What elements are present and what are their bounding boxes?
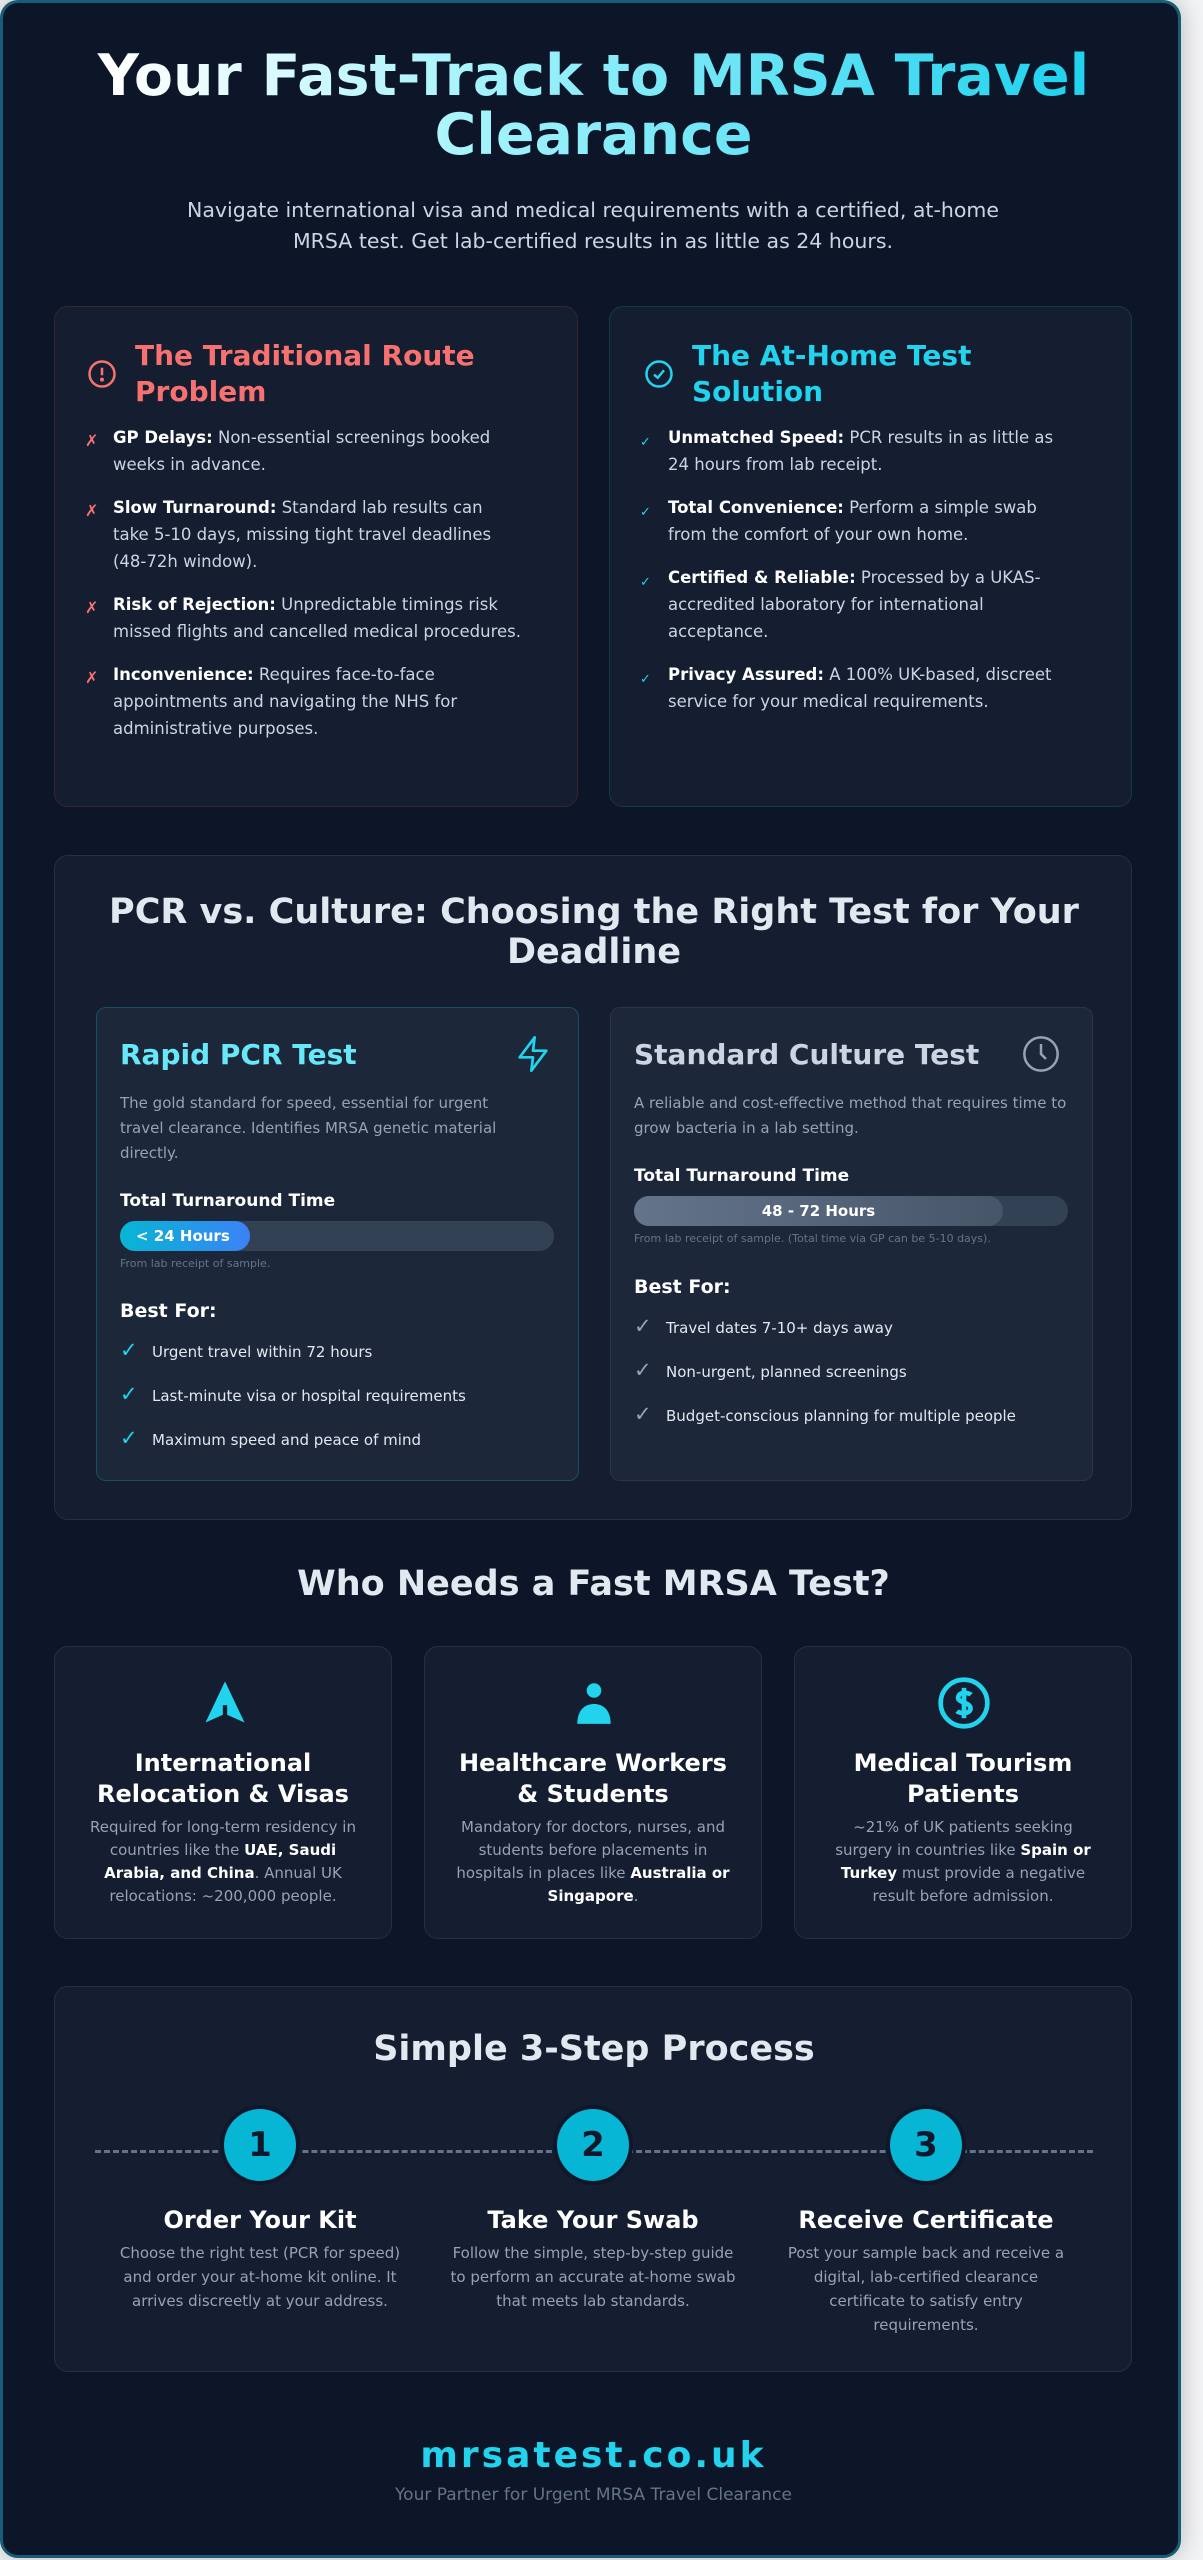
- turnaround bar PCR: [120, 1191, 554, 1270]
- best for PCR: [120, 1300, 466, 1450]
- solution list: Certified & Reliable: Processed by a UKAS-accredited laboratory for international acceptance.: [668, 568, 1041, 641]
- step 3: 3: [914, 2125, 938, 2165]
- card: healthcare: & Students: [517, 1780, 669, 1808]
- turnaround bar PCR: < 24 Hours: [136, 1227, 230, 1245]
- title: [3, 47, 1184, 165]
- icon: navigation arrow: [206, 1682, 244, 1722]
- card: relocation: Relocation & Visas: [97, 1780, 349, 1808]
- card: medical tourism: ~21% of UK patients seeking surgery in countries like Spain or Turkey must provide a negative result before admission.: [835, 1818, 1091, 1905]
- step 3: Receive Certificate: [798, 2206, 1054, 2234]
- card: healthcare: Healthcare Workers: [459, 1749, 727, 1777]
- best for culture: ✓: [634, 1314, 652, 1338]
- problem list: Inconvenience: Requires face-to-face appointments and navigating the NHS for administrative purposes.: [113, 665, 457, 738]
- heading: solution: The At-Home Test: [692, 339, 971, 372]
- heading: problem: Problem: [135, 375, 266, 408]
- card: medical tourism: Medical Tourism: [854, 1749, 1072, 1777]
- card: relocation: International: [135, 1749, 311, 1777]
- best for PCR: Urgent travel within 72 hours: [152, 1343, 372, 1361]
- step 3: [788, 2109, 1064, 2334]
- solution list: Unmatched Speed: PCR results in as little as 24 hours from lab receipt.: [668, 428, 1053, 474]
- problem list: GP Delays: Non-essential screenings booked weeks in advance.: [113, 428, 490, 474]
- heading: PCR vs culture: Deadline: [507, 932, 681, 972]
- best for PCR: ✓: [120, 1382, 138, 1406]
- solution list: ✓: [640, 505, 651, 520]
- card: healthcare: Mandatory for doctors, nurses, and students before placements in hospitals in places like Australia or Singapore.: [456, 1818, 730, 1905]
- best for culture: ✓: [634, 1402, 652, 1426]
- footer tagline: Your Partner for Urgent MRSA Travel Clearance: [395, 2485, 792, 2505]
- problem list: ✗: [85, 668, 98, 687]
- card: relocation: [54, 1646, 392, 1939]
- step 2: Take Your Swab: [487, 2206, 699, 2234]
- best for culture: Travel dates 7-10+ days away: [666, 1319, 893, 1337]
- best for culture: [634, 1276, 1016, 1426]
- icon: person: [577, 1683, 611, 1724]
- culture description: A reliable and cost-effective method that requires time to grow bacteria in a lab setting.: [634, 1094, 1066, 1137]
- heading: process: Simple 3-Step Process: [373, 2029, 815, 2069]
- title: Your Fast-Track to MRSA Travel: [98, 43, 1089, 109]
- panel: at-home solution: [609, 306, 1132, 807]
- icon: alert: [88, 360, 116, 388]
- PCR description: The gold standard for speed, essential for urgent travel clearance. Identifies MRSA genetic material directly.: [120, 1094, 496, 1162]
- heading: who needs: Who Needs a Fast MRSA Test?: [297, 1564, 890, 1604]
- best for PCR: ✓: [120, 1426, 138, 1450]
- solution list: ✓: [640, 672, 651, 687]
- dashed connector line: [95, 2150, 1093, 2153]
- card: relocation: Required for long-term residency in countries like the UAE, Saudi Arabia, and China. Annual UK relocations: ~200,000 people.: [90, 1818, 356, 1905]
- best for culture: ✓: [634, 1358, 652, 1382]
- solution list: [640, 428, 1053, 711]
- step 1: Choose the right test (PCR for speed) and order your at-home kit online. It arrives discreetly at your address.: [120, 2244, 400, 2310]
- panel: 3-step process: [54, 1986, 1132, 2372]
- card: medical tourism: [794, 1646, 1132, 1939]
- step 2: [450, 2109, 735, 2310]
- step 1: [120, 2109, 400, 2310]
- card: healthcare: [424, 1646, 762, 1939]
- problem list: [85, 428, 521, 738]
- best for PCR: Last-minute visa or hospital requirements: [152, 1387, 466, 1405]
- turnaround bar PCR: Total Turnaround Time: [120, 1191, 335, 1211]
- title: Clearance: [434, 102, 753, 168]
- heading: problem: The Traditional Route: [135, 339, 475, 372]
- panel: traditional route problem: [54, 306, 578, 807]
- solution list: ✓: [640, 435, 651, 450]
- heading: solution: Solution: [692, 375, 823, 408]
- heading: solution: [692, 339, 971, 408]
- heading: problem: [135, 339, 475, 408]
- PCR title: Rapid PCR Test: [120, 1038, 357, 1071]
- solution list: Total Convenience: Perform a simple swab from the comfort of your own home.: [668, 498, 1037, 544]
- icon: dollar circle: [938, 1677, 990, 1729]
- icon: clock: [1023, 1036, 1059, 1072]
- problem list: Slow Turnaround: Standard lab results can take 5-10 days, missing tight travel deadlines (48-72h window).: [113, 498, 491, 571]
- best for culture: Budget-conscious planning for multiple people: [666, 1407, 1016, 1425]
- culture title: Standard Culture Test: [634, 1038, 979, 1071]
- best for culture: Non-urgent, planned screenings: [666, 1363, 907, 1381]
- step 1: 1: [248, 2125, 272, 2165]
- turnaround bar culture: [634, 1166, 1068, 1245]
- best for PCR: ✓: [120, 1338, 138, 1362]
- card: medical tourism: Patients: [907, 1780, 1019, 1808]
- best for PCR: Maximum speed and peace of mind: [152, 1431, 421, 1449]
- step 1: Order Your Kit: [163, 2206, 357, 2234]
- problem list: ✗: [85, 501, 98, 520]
- step 2: Follow the simple, step-by-step guide to perform an accurate at-home swab that meets lab standards.: [451, 2244, 735, 2310]
- turnaround bar PCR: From lab receipt of sample.: [120, 1257, 270, 1270]
- icon: lightning: [518, 1036, 548, 1072]
- solution list: ✓: [640, 575, 651, 590]
- heading: PCR vs culture: PCR vs. Culture: Choosing the Right Test for Your: [109, 892, 1079, 932]
- step 2: 2: [581, 2125, 605, 2165]
- problem list: Risk of Rejection: Unpredictable timings risk missed flights and cancelled medical procedures.: [113, 595, 521, 641]
- problem list: ✗: [85, 431, 98, 450]
- turnaround bar culture: From lab receipt of sample. (Total time via GP can be 5-10 days).: [634, 1232, 991, 1245]
- problem list: ✗: [85, 598, 98, 617]
- solution list: Privacy Assured: A 100% UK-based, discreet service for your medical requirements.: [668, 665, 1051, 711]
- icon: check circle: [645, 360, 673, 388]
- best for culture: Best For:: [634, 1276, 731, 1298]
- turnaround bar culture: Total Turnaround Time: [634, 1166, 849, 1186]
- turnaround bar culture: 48 - 72 Hours: [762, 1202, 875, 1220]
- card: rapid PCR: [96, 1007, 579, 1481]
- heading: PCR vs culture: [109, 892, 1079, 972]
- card: standard culture: [610, 1007, 1093, 1481]
- panel: PCR vs Culture: [54, 855, 1132, 1520]
- footer brand: mrsatest.co.uk: [420, 2435, 767, 2476]
- subtitle: Navigate international visa and medical requirements with a certified, at-home MRSA test. Get lab-certified results in as little as 24 hours.: [187, 198, 999, 253]
- step 3: Post your sample back and receive a digital, lab-certified clearance certificate to satisfy entry requirements.: [788, 2244, 1064, 2334]
- best for PCR: Best For:: [120, 1300, 217, 1322]
